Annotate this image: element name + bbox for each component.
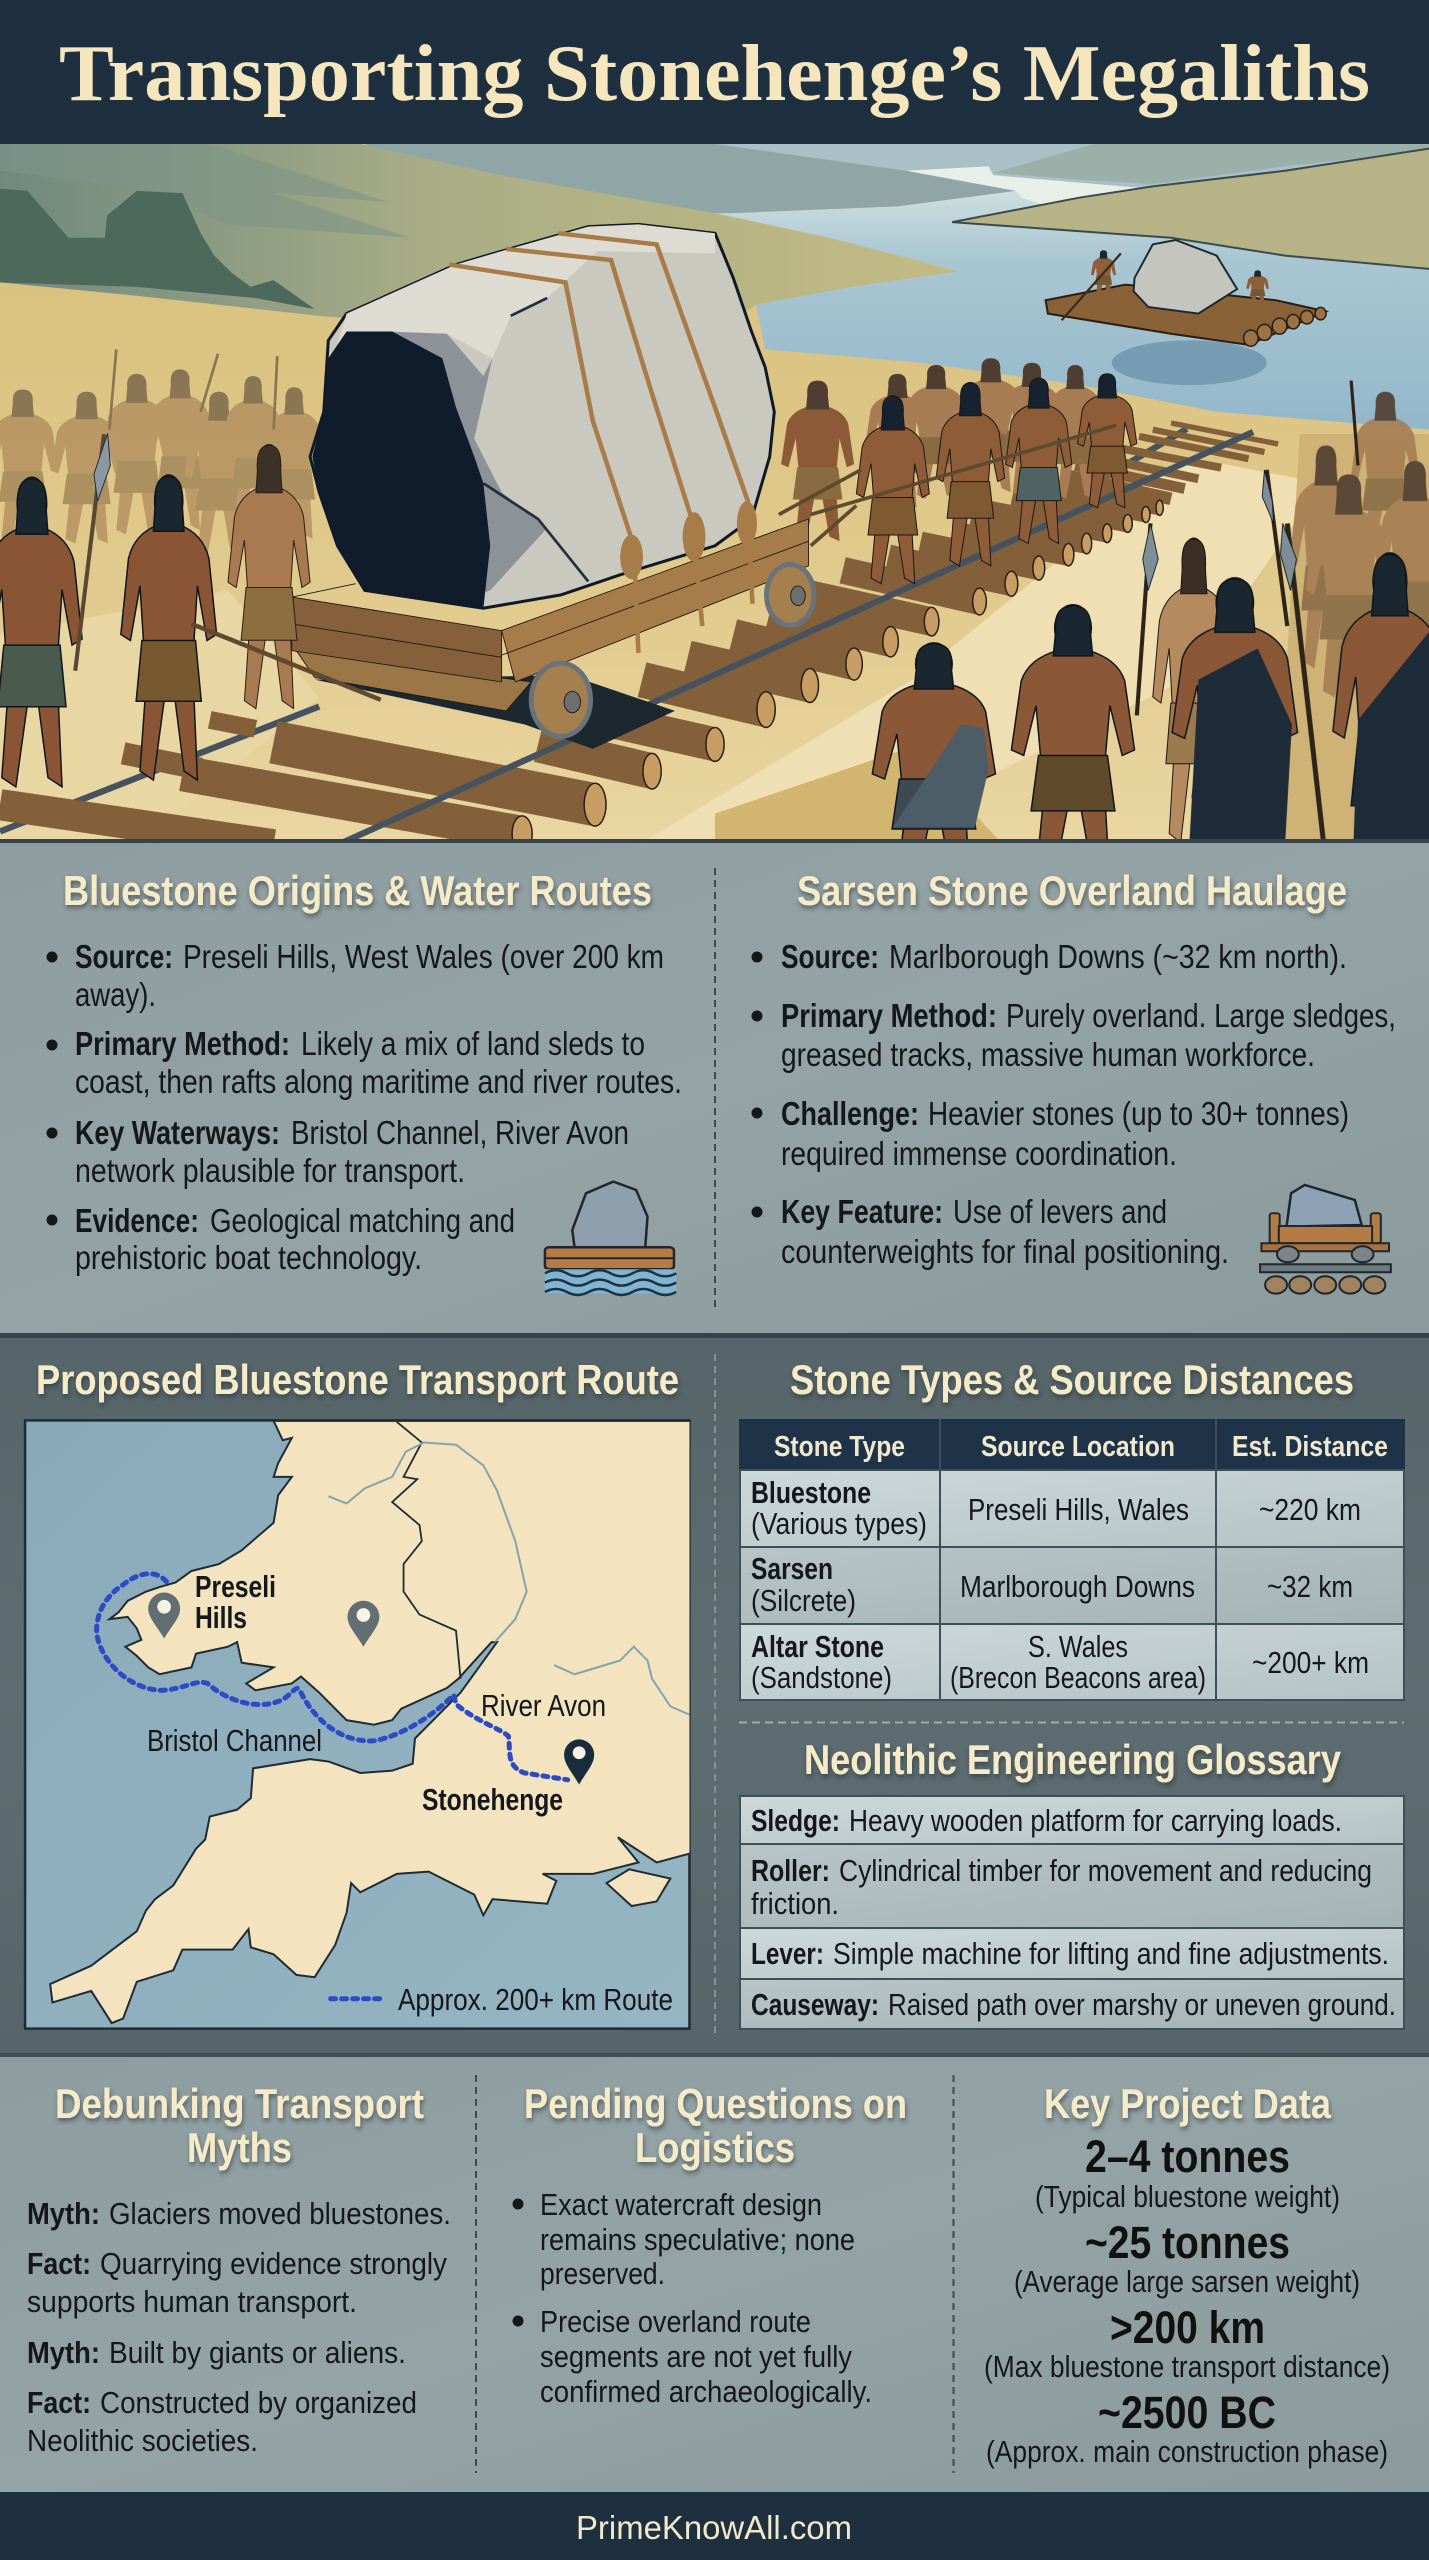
front men right with spears [872, 380, 1429, 839]
glossary list: Heavy wooden platform for carrying loads. [849, 1803, 1342, 1838]
text block: myths and facts: Glaciers moved bluestones. [109, 2196, 451, 2231]
log rollers [0, 423, 1278, 845]
text block: sarsen bullets: Key Feature: [781, 1193, 943, 1230]
text block: myths and facts: Fact: [27, 2246, 91, 2281]
glossary list: Lever: [751, 1936, 824, 1971]
text block: sarsen bullets: Challenge: [781, 1095, 919, 1132]
table: stone types and distances: Source Location [981, 1431, 1175, 1463]
river water [715, 166, 1429, 430]
text block: myths and facts: Built by giants or aliens. [109, 2335, 406, 2370]
stats: key project data: (Typical bluestone weight) [1035, 2179, 1340, 2214]
heading: pending questions [524, 2080, 907, 2171]
text block: myths and facts: Quarrying evidence strongly [100, 2246, 447, 2281]
footer: PrimeKnowAll.com [576, 2509, 852, 2546]
glossary list: Roller: [751, 1853, 830, 1888]
map: proposed bluestone route [25, 1420, 691, 2029]
stats: key project data: >200 km [1110, 2302, 1265, 2353]
heading: key data: Key Project Data [1044, 2080, 1332, 2127]
text block: myths and facts: Myth: [27, 2335, 100, 2370]
rail front [337, 432, 1253, 845]
table: stone types and distances: ~200+ km [1252, 1645, 1369, 1680]
text block: sarsen bullets: Primary Method: [781, 997, 997, 1034]
track rails behind [0, 429, 1187, 831]
text block: myths and facts: Fact: [27, 2385, 91, 2420]
table: stone types and distances: Preseli Hills, Wales [968, 1492, 1189, 1527]
title banner [0, 0, 1429, 144]
map labels: Stonehenge [422, 1782, 563, 1817]
table: stone types and distances: ~220 km [1259, 1492, 1361, 1527]
heading: sarsen haulage: Sarsen Stone Overland Haulage [797, 867, 1347, 914]
glossary list: friction. [751, 1886, 839, 1921]
map labels: Bristol Channel [147, 1723, 322, 1758]
front men left with spears [0, 433, 381, 787]
heading: stone types: Stone Types & Source Distances [790, 1356, 1354, 1403]
route: dotted line [97, 1574, 568, 1780]
text block: pending questions: remains speculative; none [540, 2222, 855, 2257]
glossary list: Causeway: [751, 1987, 879, 2022]
table: stone types and distances: (Sandstone) [751, 1660, 892, 1695]
hero illustration: hauling the megalith [0, 144, 1429, 894]
stats: key project data: 2–4 tonnes [1085, 2131, 1290, 2182]
text block: myths and facts: supports human transport. [27, 2284, 357, 2319]
panel: myths, questions and data [0, 2053, 1429, 2492]
raft with small stone [1046, 240, 1326, 385]
table: stone types and distances: S. Wales [1028, 1629, 1128, 1664]
map labels: River Avon [481, 1688, 606, 1723]
near pullers with pole [779, 374, 1137, 584]
left hill [0, 144, 959, 331]
land: Wales and south-west England [50, 1421, 691, 2023]
text block: pending questions: Precise overland route [540, 2304, 811, 2339]
map labels [147, 1569, 673, 2017]
map labels: Preseli [195, 1569, 276, 1604]
heading: glossary: Neolithic Engineering Glossary [804, 1736, 1342, 1783]
heading: transport route: Proposed Bluestone Transport Route [36, 1356, 679, 1403]
text block: myths and facts: Myth: [27, 2196, 100, 2231]
giant megalith stone [310, 224, 774, 608]
table: stone types and distances: (Brecon Beacons area) [950, 1660, 1206, 1695]
shadow under cart [315, 675, 675, 749]
text block: sarsen bullets: greased tracks, massive human workforce. [781, 1036, 1315, 1073]
text block: sarsen bullets: counterweights for final positioning. [781, 1233, 1229, 1270]
table: stone types and distances: Altar Stone [751, 1629, 884, 1664]
heading: myths: Debunking Transport [55, 2080, 424, 2127]
log ends [512, 500, 1163, 852]
heading: myths [55, 2080, 424, 2171]
text block: myths and facts: Neolithic societies. [27, 2423, 258, 2458]
text block: bluestone bullets: Primary Method: [75, 1025, 290, 1062]
text block: pending questions: segments are not yet fully [540, 2339, 852, 2374]
text block: bluestone bullets: away). [75, 976, 156, 1013]
panel: route map and reference tables [0, 1338, 1429, 2055]
table: stone types and distances: Bluestone [751, 1475, 871, 1510]
heading: pending questions: Logistics [635, 2124, 795, 2171]
sledge cart [292, 519, 814, 736]
icon: stone on roller cart [1260, 1185, 1391, 1294]
stats: key project data [984, 2131, 1390, 2469]
heading: myths: Myths [187, 2124, 292, 2171]
text block: sarsen bullets: Source: [781, 938, 879, 975]
icon: stone on raft [545, 1182, 676, 1295]
pin: Preseli Hills [148, 1593, 180, 1638]
text block: pending questions: confirmed archaeologically. [540, 2374, 872, 2409]
table: stone types and distances: Est. Distance [1232, 1431, 1388, 1463]
heading: bluestone origins: Bluestone Origins & Water Routes [63, 867, 652, 914]
heading: pending questions: Pending Questions on [524, 2080, 907, 2127]
table: stone types and distances: Marlborough Downs [960, 1569, 1195, 1604]
text block: myths and facts [27, 2196, 451, 2458]
legend line [331, 1996, 385, 2001]
stats: key project data: (Average large sarsen weight) [1014, 2264, 1360, 2299]
far right hills [993, 144, 1429, 184]
glossary list: Sledge: [751, 1803, 840, 1838]
stats: key project data: ~25 tonnes [1085, 2217, 1290, 2268]
table: stone types and distances: Sarsen [751, 1551, 833, 1586]
table: stone types and distances [739, 1419, 1405, 1700]
text block: bluestone bullets: Evidence: [75, 1202, 199, 1239]
text block: sarsen bullets: Use of levers and [953, 1193, 1167, 1230]
sand ground [0, 282, 1429, 845]
pin: Brecon [347, 1601, 379, 1647]
text block: bluestone bullets: network plausible for transport. [75, 1152, 465, 1189]
table: stone types and distances: (Silcrete) [751, 1583, 856, 1618]
text block: bluestone bullets: coast, then rafts along maritime and river routes. [75, 1063, 682, 1100]
text block: bluestone bullets: Source: [75, 938, 173, 975]
text block: bluestone bullets [46, 938, 682, 1276]
text block: bluestone bullets: Likely a mix of land sleds to [301, 1025, 645, 1062]
title banner: Transporting Stonehenge’s Megaliths [59, 30, 1370, 118]
text block: bluestone bullets: prehistoric boat technology. [75, 1239, 422, 1276]
trees [0, 189, 315, 309]
map labels: Approx. 200+ km Route [398, 1982, 673, 2017]
text block: myths and facts: Constructed by organized [100, 2385, 417, 2420]
footer [0, 2492, 1429, 2560]
text block: bluestone bullets: Preseli Hills, West Wales (over 200 km [183, 938, 664, 975]
text block: sarsen bullets: required immense coordination. [781, 1135, 1177, 1172]
far pullers [781, 358, 1104, 541]
stats: key project data: ~2500 BC [1098, 2387, 1276, 2438]
panel: transport methods [0, 839, 1429, 1338]
text block: pending questions: preserved. [540, 2256, 665, 2291]
table: stone types and distances: ~32 km [1267, 1569, 1353, 1604]
text block: bluestone bullets: Geological matching and [210, 1202, 515, 1239]
text block: pending questions: Exact watercraft design [540, 2187, 822, 2222]
text block: sarsen bullets: Heavier stones (up to 30+ tonnes) [928, 1095, 1349, 1132]
far crowd left [0, 349, 325, 552]
text block: pending questions [512, 2187, 872, 2409]
ropes [449, 233, 752, 653]
table: stone types and distances: Stone Type [774, 1431, 905, 1463]
map labels: Hills [195, 1600, 247, 1635]
table: stone types and distances: (Various types) [751, 1506, 927, 1541]
text block: bluestone bullets: Key Waterways: [75, 1114, 280, 1151]
text block: sarsen bullets: Marlborough Downs (~32 km north). [889, 938, 1347, 975]
pin: Stonehenge [564, 1739, 594, 1784]
glossary list [740, 1796, 1404, 2029]
text block: sarsen bullets [752, 938, 1396, 1270]
far crowd right [1290, 392, 1429, 698]
text block: bluestone bullets: Bristol Channel, River Avon [291, 1114, 629, 1151]
mid man left [228, 445, 310, 709]
